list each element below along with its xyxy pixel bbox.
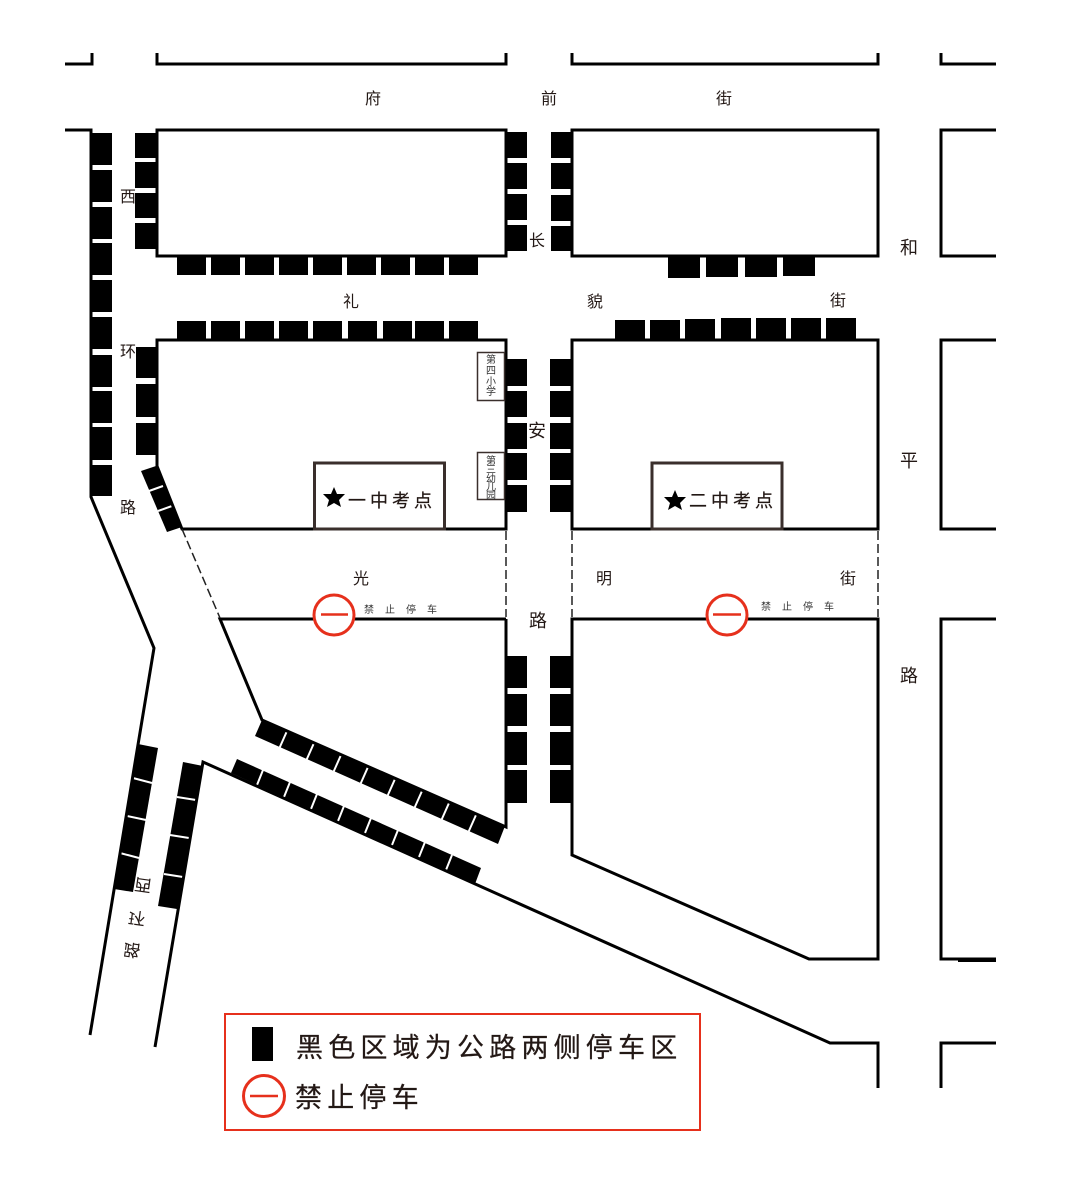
street labels: 光 [353,570,369,588]
no parking sign east [707,595,845,635]
street labels: 安 [528,421,546,441]
school: third kindergarten: 园 [486,490,496,502]
street labels: 貌 [587,293,603,311]
legend parking text: 黑色区域为公路两侧停车区 [296,1033,682,1063]
flipped road name [122,874,153,960]
street labels: 前 [541,90,557,108]
no parking sign west [314,595,448,635]
street labels: 路 [120,499,136,517]
exam site two: 二中考点 [689,491,777,511]
parking: east lower block north side [615,318,856,340]
legend no parking text: 禁止停车 [295,1083,424,1113]
street labels: 环 [120,344,136,361]
exam site one: 一中考点 [348,491,436,511]
legend no parking icon [244,1076,284,1116]
no parking sign east: 禁止停车 [761,600,845,613]
school: fourth primary: 四 [486,366,496,377]
parking: lower block north side [177,321,478,340]
street labels: 府 [365,90,381,108]
street labels [120,90,918,686]
road curbs [65,53,996,1088]
school: fourth primary: 小 [486,376,496,388]
parking: diagonal row south [231,759,481,884]
parking: diagonal row north [255,720,505,844]
street labels: 长 [529,232,545,250]
parking: west ring road diagonal cells [141,466,182,532]
flipped road name: 西 [133,874,153,895]
school: fourth primary [478,352,504,400]
parking: west ring road outer column [90,133,112,496]
school: third kindergarten: 第 [486,454,496,467]
street labels: 街 [716,90,732,108]
parking: southwest road left column [114,744,158,892]
flipped road name: 环 [127,907,147,928]
street labels: 平 [900,451,918,471]
parking: southwest road right column [158,762,203,909]
exam site one [314,463,444,529]
street labels: 路 [529,611,547,631]
legend [225,1014,700,1130]
street labels: 街 [830,292,846,310]
school: fourth primary: 学 [486,385,496,398]
parking: west ring road inner column [135,133,157,455]
school: third kindergarten: 幼 [486,472,496,485]
parking: east upper block south side [668,256,815,278]
exam site two [652,463,782,529]
street labels: 街 [840,570,856,588]
school: fourth primary: 第 [486,353,496,366]
street labels: 路 [900,666,918,686]
school: third kindergarten [478,452,504,502]
legend black swatch [252,1027,273,1061]
street labels: 礼 [343,293,359,311]
flipped road name: 路 [122,939,142,960]
street labels: 和 [900,238,918,258]
parking: upper block south side [177,256,478,275]
street labels: 西 [120,189,136,206]
school: third kindergarten: 儿 [486,481,496,493]
school: third kindergarten: 三 [486,465,496,476]
parking: Chang'an road both sides [505,132,572,803]
no parking sign west: 禁止停车 [364,603,448,616]
street labels: 明 [596,571,612,588]
